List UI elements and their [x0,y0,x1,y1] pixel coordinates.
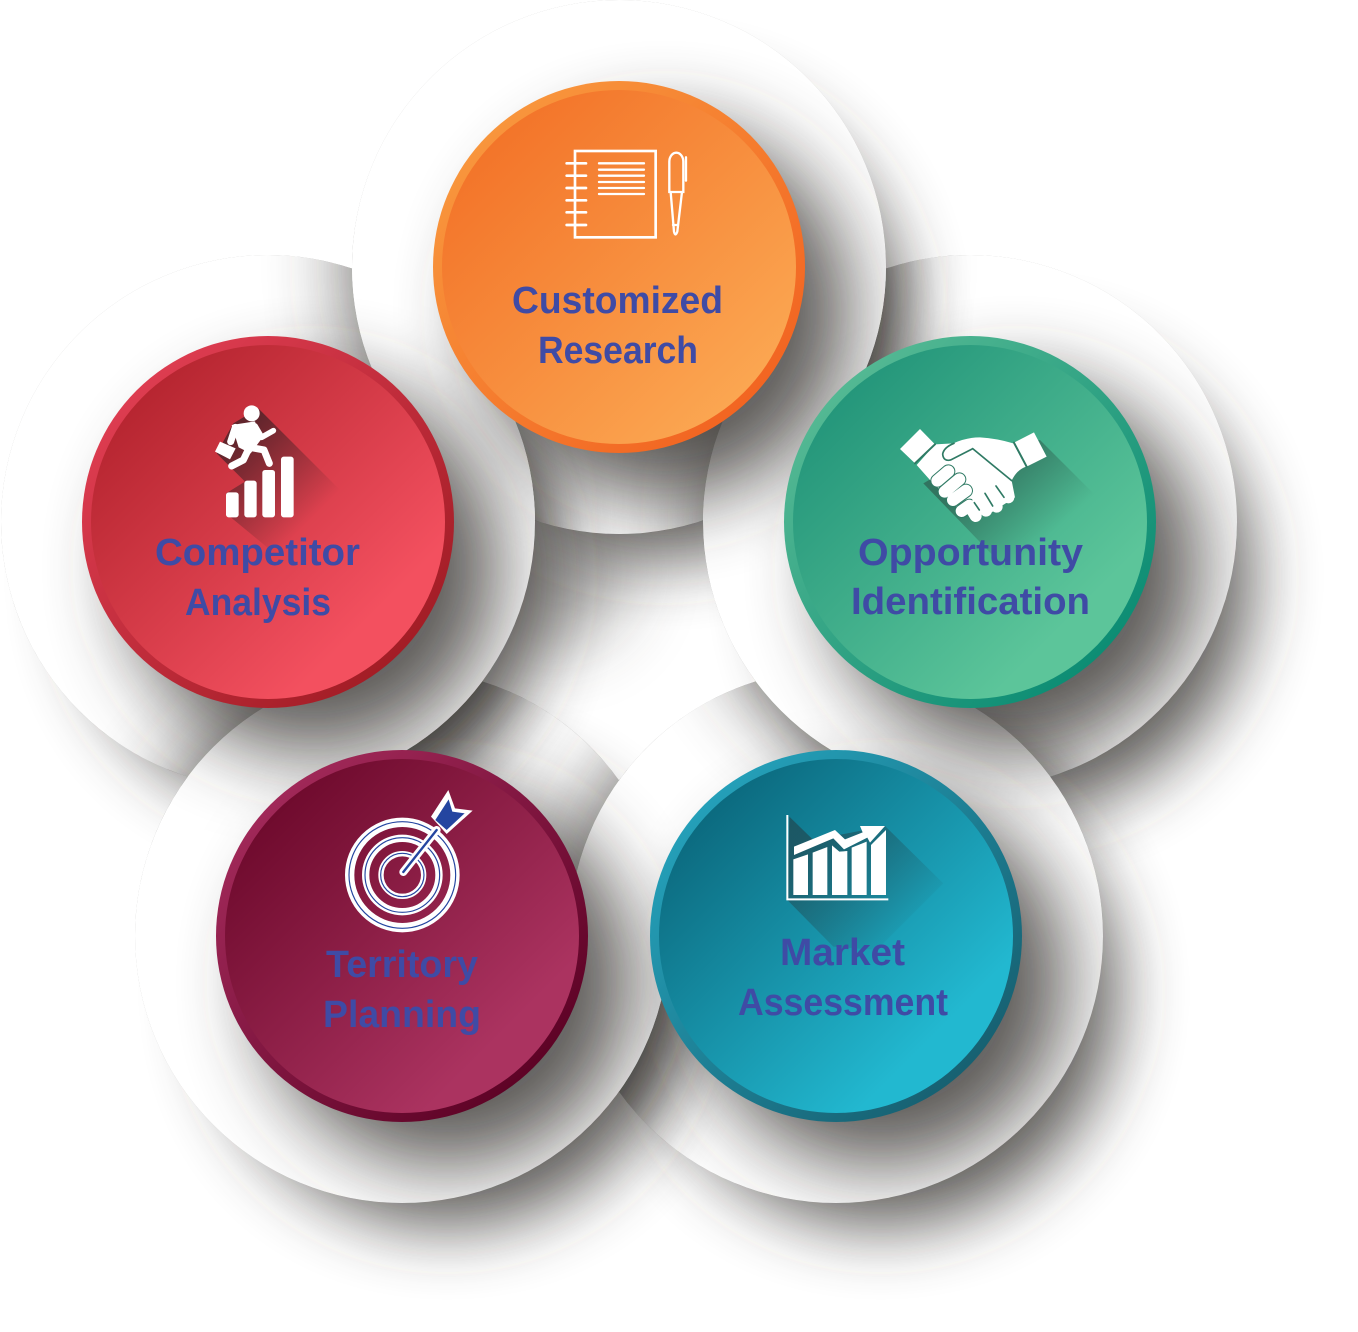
label: Territory Planning: Territory [326,944,478,986]
label: Territory Planning [323,944,481,1036]
label: Market Assessment: Market [780,932,905,974]
label: Opportunity Identification: Identification [851,581,1090,623]
label: Territory Planning: Planning [323,994,481,1036]
panel: Customized Research [433,81,805,453]
label: Market Assessment [738,932,948,1024]
icon: rising bar chart [787,815,943,950]
icon: notebook and pen [567,151,686,237]
white overlap lenses between neighbouring discs [188,268,1050,1092]
label: Competitor Analysis: Competitor [155,532,360,574]
cast shadows of coloured circles [127,126,1201,1167]
label: Customized Research: Customized [512,280,723,322]
label: Opportunity Identification [851,532,1090,623]
panel: Territory Planning [216,750,588,1122]
icon: target with dart [349,790,473,928]
panel: Market Assessment [650,750,1022,1122]
label: Opportunity Identification: Opportunity [858,532,1083,574]
panel: Opportunity Identification [784,336,1156,708]
label: Competitor Analysis: Analysis [185,582,331,624]
label: Competitor Analysis [155,532,360,624]
inner overlap layer of white discs [406,422,832,872]
label: Customized Research: Research [538,330,698,372]
icon: handshake [900,429,1097,577]
panel: Competitor Analysis [82,336,454,708]
icon: businessman climbing bars [215,405,357,563]
label: Market Assessment: Assessment [738,982,948,1024]
label: Customized Research [512,280,723,372]
